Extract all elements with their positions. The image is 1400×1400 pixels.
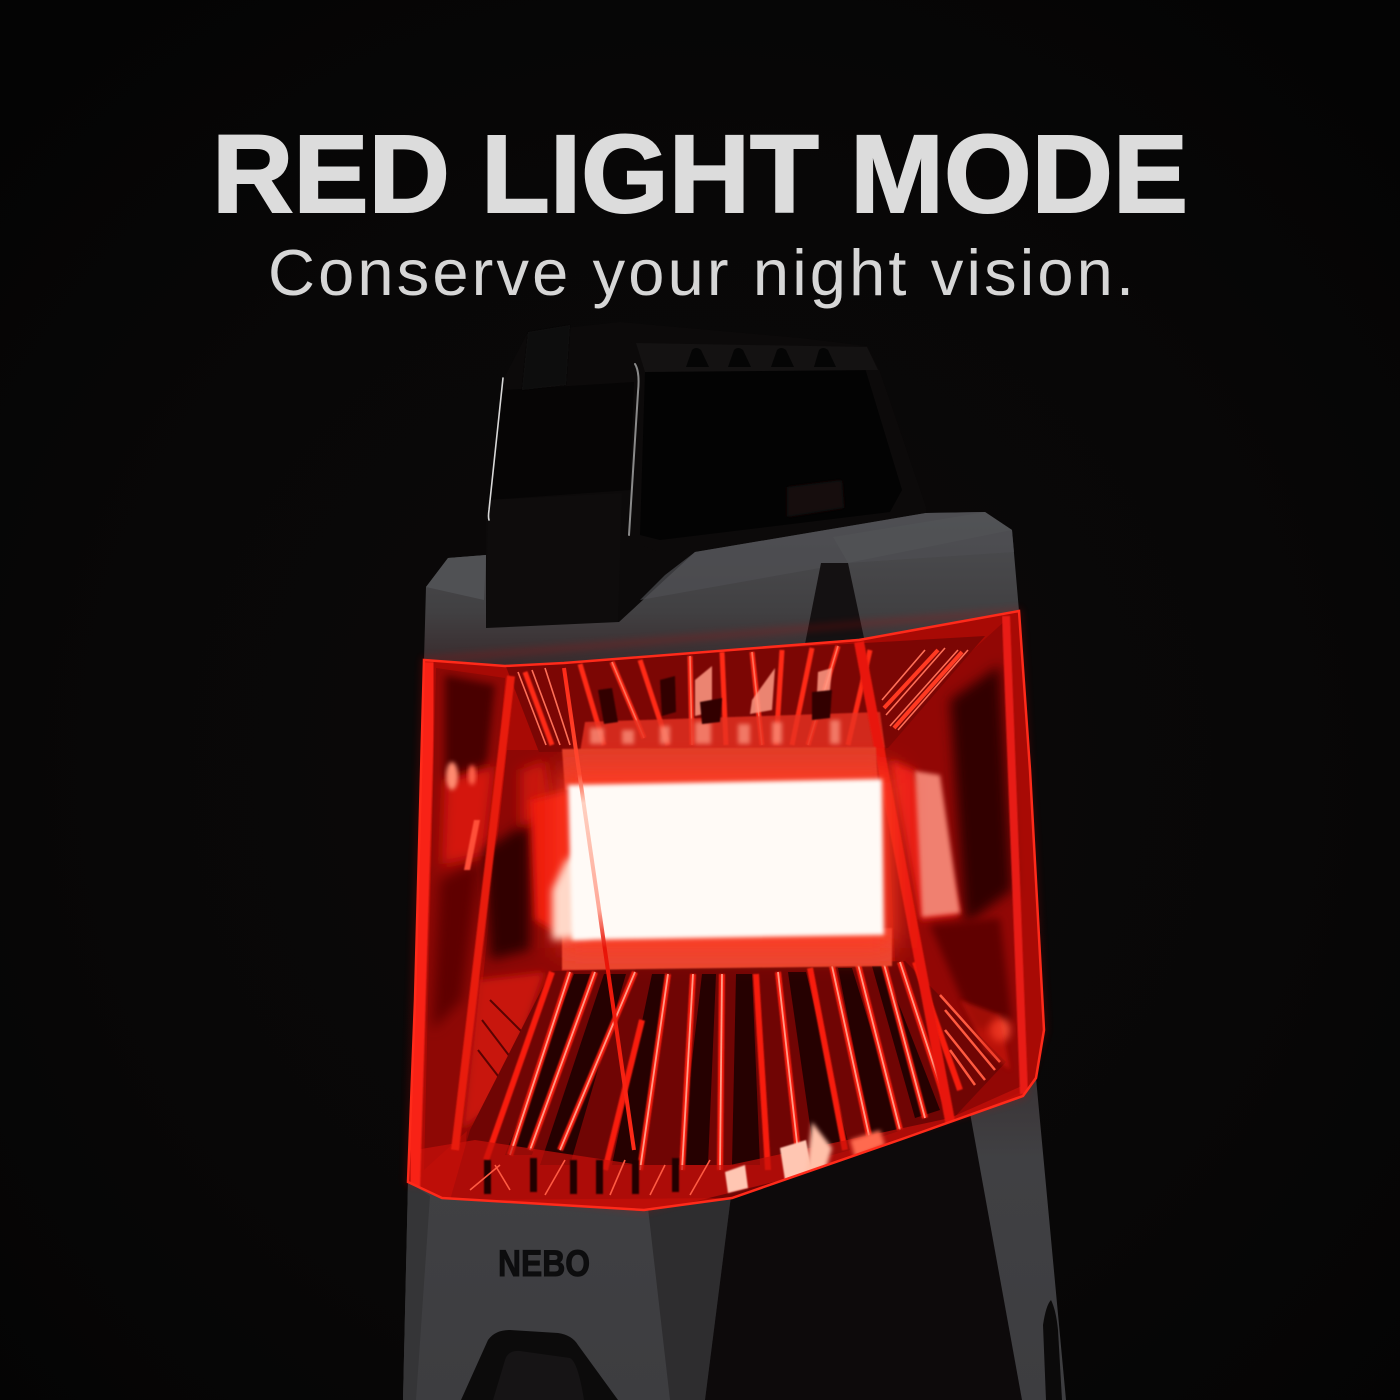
power button bbox=[461, 1330, 618, 1400]
side struts bbox=[414, 616, 1024, 1190]
infographic canvas bbox=[218, 134, 1185, 1400]
lantern bbox=[400, 322, 1066, 1400]
red glow around lens bbox=[408, 611, 1044, 1210]
soft glow left of light bar bbox=[552, 850, 590, 940]
lens bright rim bbox=[408, 611, 1044, 1210]
lantern handle bbox=[486, 322, 926, 628]
lower body bbox=[403, 1078, 1066, 1400]
handle highlights bbox=[488, 364, 639, 535]
NEBO logo: NEBO bbox=[498, 1243, 590, 1284]
glowing light bar bbox=[568, 779, 884, 940]
handle grip teeth bbox=[636, 343, 878, 372]
upper diffuser bar bbox=[562, 747, 878, 790]
side slit bbox=[1043, 1300, 1062, 1400]
lower fins bbox=[450, 961, 1010, 1200]
bottom lens strip bbox=[410, 1085, 1024, 1215]
upper fins bbox=[505, 636, 985, 752]
subtitle: Conserve your night vision. bbox=[268, 236, 1134, 309]
inner left wall bbox=[462, 750, 570, 1150]
top grey band bbox=[424, 512, 1019, 666]
left side panel bbox=[424, 668, 505, 1170]
inner right wall bbox=[885, 620, 1025, 1125]
lower diffuser bar bbox=[562, 928, 892, 970]
title: RED LIGHT MODE bbox=[212, 113, 1188, 236]
strut across light bbox=[564, 668, 634, 1150]
red lens bbox=[400, 600, 1060, 1230]
halo around light bar bbox=[560, 770, 895, 948]
